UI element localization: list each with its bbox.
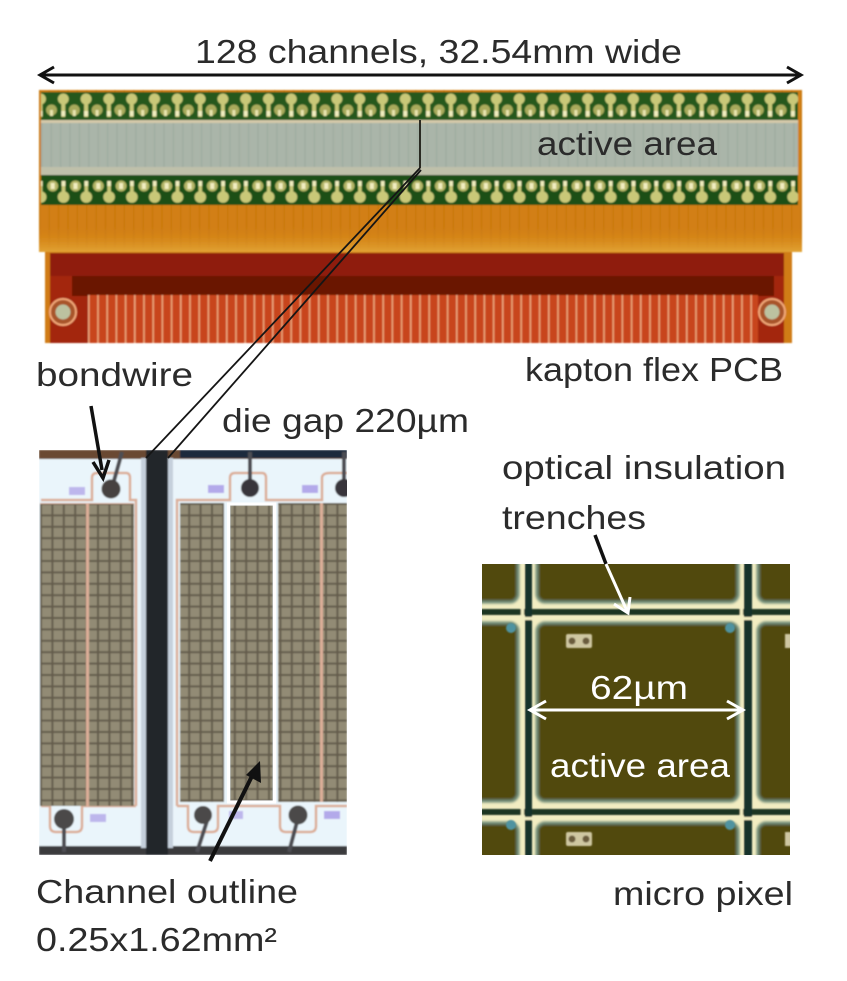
- panel: micro pixel photo: [482, 534, 790, 855]
- gray active strip: [41, 121, 798, 173]
- label: optical insulation trenches: optical insulation: [502, 449, 786, 486]
- dark trenches: [470, 609, 800, 615]
- dimension arrow 62 micron: [530, 701, 743, 719]
- label: micro pixel: micro pixel: [613, 875, 793, 912]
- cream crossing lines: [482, 564, 790, 855]
- channel outline box: [228, 504, 274, 802]
- heading: width dimension: 128 channels, 32.54mm wide: [195, 33, 682, 70]
- green top pad band: [41, 92, 798, 122]
- label: kapton flex PCB: kapton flex PCB: [525, 351, 783, 388]
- label: channel outline: 0.25x1.62mm²: [36, 921, 277, 958]
- bottom edge: [39, 846, 347, 855]
- panel: silicon die photo: [39, 450, 353, 855]
- mounting hole right: [759, 299, 785, 325]
- label: channel outline: [36, 873, 298, 958]
- panel: flex PCB photo: [39, 90, 802, 343]
- trench arrow white part: [606, 564, 630, 613]
- trench arrow black part: [595, 535, 606, 564]
- label: active area in pixel: active area: [550, 747, 731, 784]
- label: bondwire: bondwire: [36, 356, 193, 393]
- flex tail: [45, 252, 792, 343]
- copper traces: [41, 473, 136, 806]
- width arrow: [40, 67, 801, 83]
- left die channels: [40, 503, 134, 806]
- bond pads: [102, 480, 120, 498]
- label: die gap: die gap 220µm: [222, 402, 469, 439]
- right die channels: [180, 503, 224, 802]
- arrow: bondwire: [91, 406, 109, 478]
- corner contacts: [506, 623, 791, 846]
- top edge: [39, 450, 347, 459]
- pixel bodies: [482, 564, 790, 855]
- orange stiffener: [39, 90, 802, 252]
- arrow: channel outline: [210, 761, 261, 861]
- heading: width dimension: [40, 33, 801, 83]
- mounting hole left: [50, 299, 76, 325]
- bond wires: [64, 452, 344, 852]
- green bottom pad band: [41, 175, 798, 205]
- label: 62 micron: 62µm: [590, 669, 688, 706]
- die gap line on strip: [419, 120, 421, 168]
- label: optical insulation trenches: [502, 449, 786, 536]
- zoom lines from PCB to die gap: [146, 168, 421, 458]
- label: optical insulation trenches: trenches: [502, 499, 646, 536]
- label: channel outline: Channel outline: [36, 873, 298, 910]
- die gap: [146, 450, 168, 855]
- label: active area on strip: active area: [537, 125, 718, 162]
- purple labels: [69, 487, 85, 495]
